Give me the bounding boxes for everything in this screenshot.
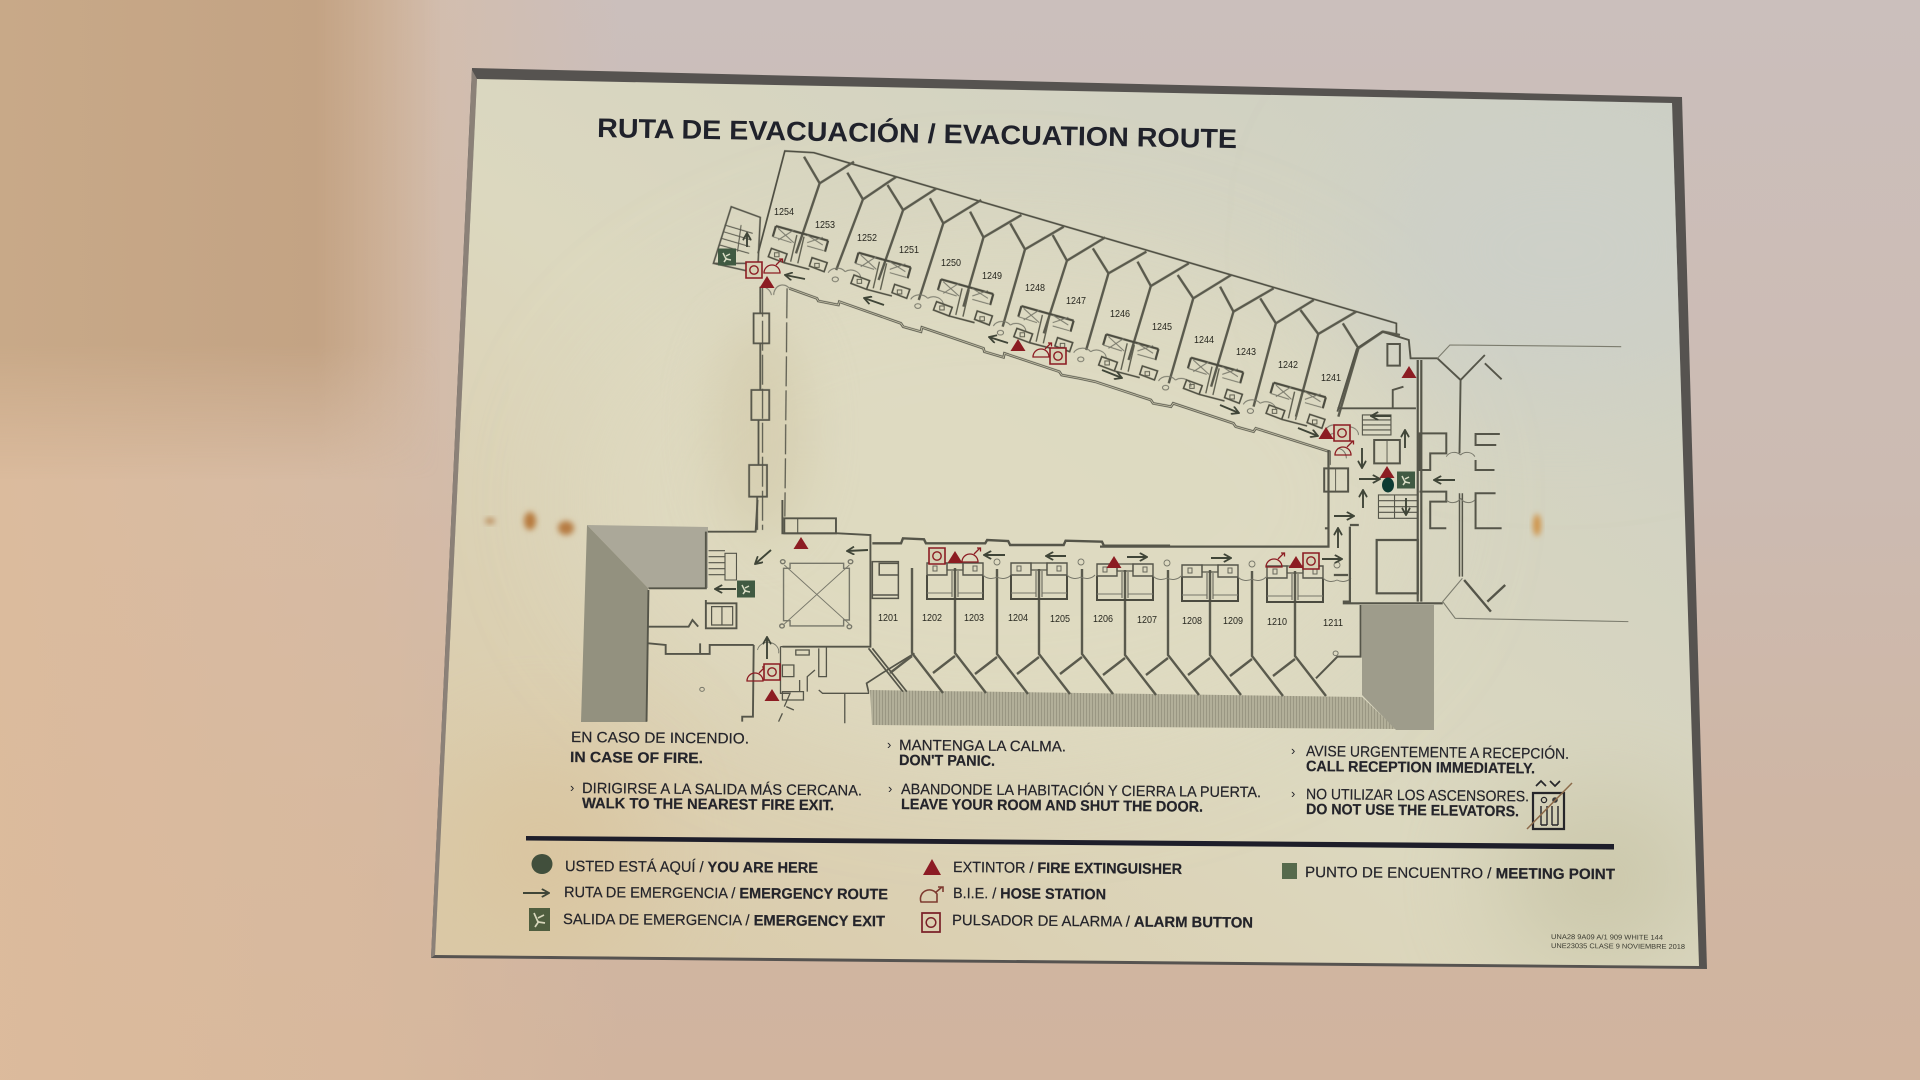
panel: sign plate with frame (431, 68, 1760, 969)
room numbers: 1247 (1066, 295, 1086, 307)
grey block: left terrace (581, 525, 708, 722)
room numbers: 1253 (815, 219, 835, 231)
instruction: call reception: › (1291, 743, 1295, 758)
bathroom modules: top wing (768, 226, 1358, 438)
east core and east wing walls (1100, 332, 1628, 678)
grey block: right terrace (1362, 605, 1434, 730)
west corridor walls (749, 285, 789, 530)
heading: in case of fire: IN CASE OF FIRE. (570, 749, 703, 767)
room numbers: 1242 (1278, 359, 1298, 371)
room numbers: 1249 (982, 270, 1002, 282)
legend: emergency exit: SALIDA DE EMERGENCIA / EMERGENCY EXIT (563, 911, 885, 930)
room numbers: 1210 (1267, 616, 1287, 628)
instruction: call reception (1291, 743, 1569, 777)
legend: alarm button: PULSADOR DE ALARMA / ALARM BUTTON (952, 912, 1253, 932)
legend: you are here: USTED ESTÁ AQUÍ / YOU ARE HERE (565, 858, 818, 877)
instruction: walk to nearest exit: WALK TO THE NEAREST FIRE EXIT. (582, 795, 834, 814)
room numbers: 1243 (1236, 346, 1256, 358)
instruction: walk to nearest exit: › (570, 780, 574, 795)
title: RUTA DE EVACUACIÓN / EVACUATION ROUTE (597, 112, 1237, 154)
instruction: leave room: LEAVE YOUR ROOM AND SHUT THE DOOR. (901, 796, 1203, 816)
room numbers: 1206 (1093, 613, 1113, 625)
bathroom modules: lower wing (927, 559, 1351, 602)
room numbers: 1248 (1025, 282, 1045, 294)
instruction: no elevators: › (1291, 786, 1295, 801)
top wing rooms and walls (713, 151, 1400, 530)
west lobby and lower wing walls (647, 500, 1170, 723)
instruction: leave room (888, 781, 1261, 816)
fire extinguishers on plan (760, 276, 1416, 701)
icon: no elevators (1527, 781, 1572, 829)
small print reference: UNE23035 CLASE 9 NOVIEMBRE 2018 (1551, 943, 1685, 951)
heading: in case of fire (570, 729, 749, 767)
stains: rust spots (485, 512, 1541, 536)
heading: in case of fire: EN CASO DE INCENDIO. (571, 729, 749, 748)
room numbers: 1250 (941, 257, 961, 269)
legend (523, 854, 1615, 932)
room numbers: 1241 (1321, 372, 1341, 384)
room 1201 bath (872, 562, 898, 598)
instruction: no elevators: NO UTILIZAR LOS ASCENSORES. (1306, 786, 1529, 805)
room numbers: 1251 (899, 244, 919, 256)
legend: emergency route: RUTA DE EMERGENCIA / EMERGENCY ROUTE (564, 884, 888, 903)
room numbers: 1204 (1008, 612, 1028, 624)
evacuation route arrows (715, 233, 1455, 659)
small print reference: UNA28 9A09 A/1 909 WHITE 144 (1551, 934, 1663, 942)
you are here marker (1382, 478, 1394, 492)
room numbers: 1207 (1137, 614, 1157, 626)
room numbers: 1202 (922, 612, 942, 624)
room numbers: 1245 (1152, 321, 1172, 333)
room numbers: 1244 (1194, 334, 1214, 346)
instruction: leave room: › (888, 781, 892, 796)
room numbers: 1254 (774, 206, 794, 218)
room numbers: 1211 (1323, 617, 1343, 629)
room numbers: 1209 (1223, 615, 1243, 627)
grey block: bottom hatched terrace (870, 690, 1396, 729)
stair: west (709, 551, 736, 580)
room numbers: 1246 (1110, 308, 1130, 320)
instruction: call reception: AVISE URGENTEMENTE A RECEPCIÓN. (1306, 743, 1569, 763)
stair: upper east (1362, 415, 1391, 435)
instruction: no elevators (1291, 786, 1529, 820)
hose stations on plan (747, 259, 1354, 681)
instruction: no elevators: DO NOT USE THE ELEVATORS. (1306, 801, 1519, 820)
small print reference (1551, 934, 1685, 951)
emergency exits on plan (718, 248, 1415, 598)
instruction: walk to nearest exit (570, 780, 862, 814)
instruction: don't panic (887, 737, 1066, 770)
room numbers: 1205 (1050, 613, 1070, 625)
room numbers (774, 206, 1343, 629)
alarm buttons on plan (746, 262, 1350, 680)
stairwell: left end (713, 207, 760, 273)
stair: lower east (1378, 495, 1418, 518)
instruction: don't panic: DON'T PANIC. (899, 752, 995, 770)
instruction: leave room: ABANDONDE LA HABITACIÓN Y CIERRA LA PUERTA. (901, 781, 1261, 801)
legend: hose station: B.I.E. / HOSE STATION (953, 885, 1106, 903)
room numbers: 1208 (1182, 615, 1202, 627)
service rooms (779, 647, 869, 723)
instruction: don't panic: MANTENGA LA CALMA. (899, 737, 1066, 755)
floor plan (581, 151, 1628, 730)
divider rule (526, 836, 1614, 850)
room numbers: 1201 (878, 612, 898, 624)
instruction: call reception: CALL RECEPTION IMMEDIATELY. (1306, 758, 1535, 777)
room numbers: 1203 (964, 612, 984, 624)
instruction: don't panic: › (887, 737, 891, 752)
atrium (780, 560, 853, 629)
instruction: walk to nearest exit: DIRIGIRSE A LA SALIDA MÁS CERCANA. (582, 780, 862, 799)
legend: meeting point: PUNTO DE ENCUENTRO / MEETING POINT (1305, 864, 1615, 883)
legend: fire extinguisher: EXTINTOR / FIRE EXTINGUISHER (953, 859, 1182, 878)
lower wing partitions (890, 568, 1326, 696)
room numbers: 1252 (857, 232, 877, 244)
